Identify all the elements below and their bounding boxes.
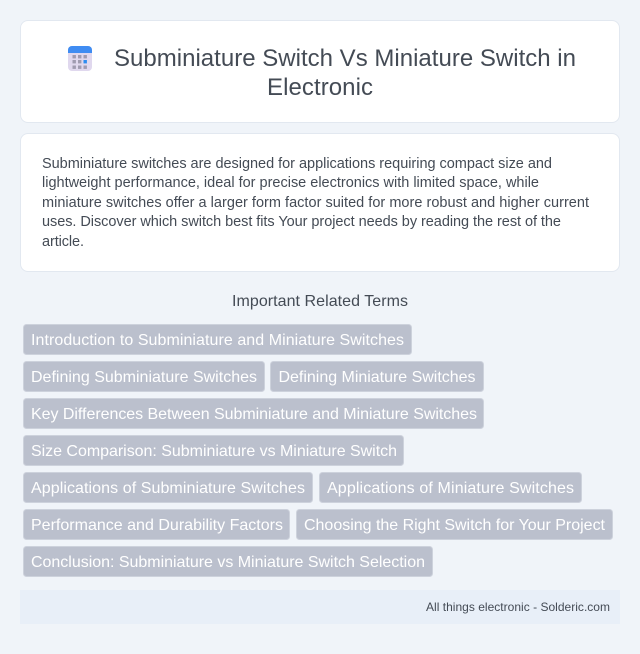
text block: description: article. — [42, 234, 84, 250]
tag: Choosing the Right Switch for Your Project — [304, 517, 606, 534]
tag: Defining Subminiature Switches — [31, 369, 257, 386]
tag: Applications of Miniature Switches — [327, 480, 574, 497]
panel: description card — [20, 133, 620, 272]
text block: description: Subminiature switches are designed for applications requiring compact size and — [42, 156, 552, 172]
tag: Conclusion: Subminiature vs Miniature Switch Selection — [31, 554, 425, 571]
tag: Size Comparison: Subminiature vs Miniature Switch — [31, 443, 397, 460]
text block: description: miniature switches offer a larger form factor suited for more robust and higher current — [42, 195, 589, 211]
tag — [24, 510, 290, 540]
tag: Performance and Durability Factors — [31, 517, 283, 534]
icon: calendar — [68, 46, 92, 71]
tag — [320, 472, 582, 502]
text block: description: lightweight performance, ideal for precise electronics with limited space, while — [42, 175, 539, 191]
title — [114, 45, 576, 101]
tag list — [24, 324, 612, 576]
tag — [24, 398, 484, 428]
tag: Applications of Subminiature Switches — [31, 480, 305, 497]
tag — [24, 546, 432, 576]
text block: description — [42, 156, 589, 250]
tag — [296, 510, 612, 540]
footer text: All things electronic - Solderic.com — [426, 600, 610, 614]
tag: Introduction to Subminiature and Miniature Switches — [31, 332, 404, 349]
heading: related terms: Important Related Terms — [232, 293, 408, 310]
tag: Defining Miniature Switches — [278, 369, 476, 386]
panel: title card — [20, 20, 620, 123]
text block: description: uses. Discover which switch best fits Your project needs by reading the rest of the — [42, 214, 561, 230]
tag — [24, 324, 412, 354]
title: Electronic — [267, 74, 373, 101]
tag — [24, 472, 312, 502]
tag: Key Differences Between Subminiature and Miniature Switches — [31, 406, 477, 423]
tag — [270, 362, 484, 392]
tag — [24, 436, 404, 466]
footer bar — [20, 590, 620, 624]
tag — [24, 362, 264, 392]
title: Subminiature Switch Vs Miniature Switch in — [114, 45, 576, 72]
